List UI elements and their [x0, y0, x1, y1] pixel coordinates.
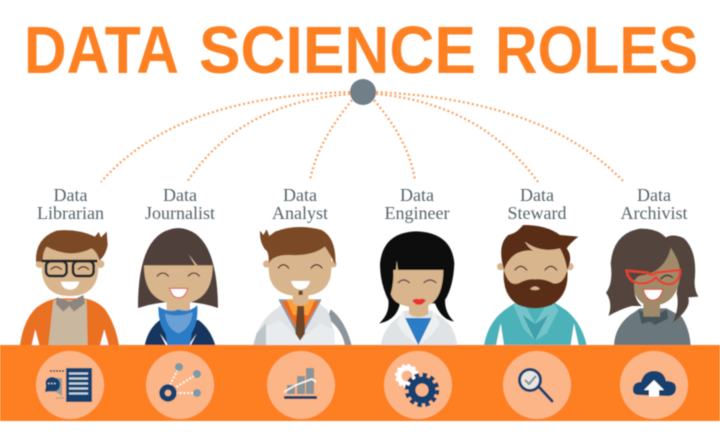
- icon: analyst bar chart: [267, 351, 335, 419]
- title: SCIENCE: [199, 13, 476, 88]
- dotted connectors: [101, 92, 624, 182]
- title: DATA: [24, 13, 179, 88]
- character: data steward: [484, 225, 587, 345]
- role labels: Archivist: [620, 203, 688, 223]
- role labels: [37, 185, 688, 223]
- role labels: Engineer: [385, 203, 449, 223]
- character: data librarian: [20, 230, 119, 345]
- character: data analyst: [253, 227, 352, 345]
- role labels: Steward: [508, 203, 566, 223]
- orange band: [0, 345, 720, 421]
- icon: archivist cloud upload: [620, 351, 688, 419]
- character: data engineer: [379, 231, 457, 345]
- role labels: Data: [283, 185, 317, 205]
- role labels: Librarian: [37, 203, 104, 223]
- icon: journalist network: [146, 351, 214, 419]
- icon: librarian chat and document: [36, 351, 104, 419]
- role labels: Analyst: [272, 203, 328, 223]
- hub circle: [350, 79, 376, 105]
- role labels: Journalist: [145, 203, 215, 223]
- role labels: Data: [520, 185, 554, 205]
- role labels: Data: [54, 185, 87, 205]
- role labels: Data: [163, 185, 197, 205]
- role labels: Data: [400, 185, 434, 205]
- character: data journalist: [138, 228, 218, 345]
- title: ROLES: [495, 13, 698, 88]
- icon: steward magnifier: [503, 351, 571, 419]
- icon: engineer gears: [384, 351, 452, 419]
- title: [24, 13, 698, 88]
- role labels: Data: [637, 185, 671, 205]
- character: data archivist: [606, 229, 698, 345]
